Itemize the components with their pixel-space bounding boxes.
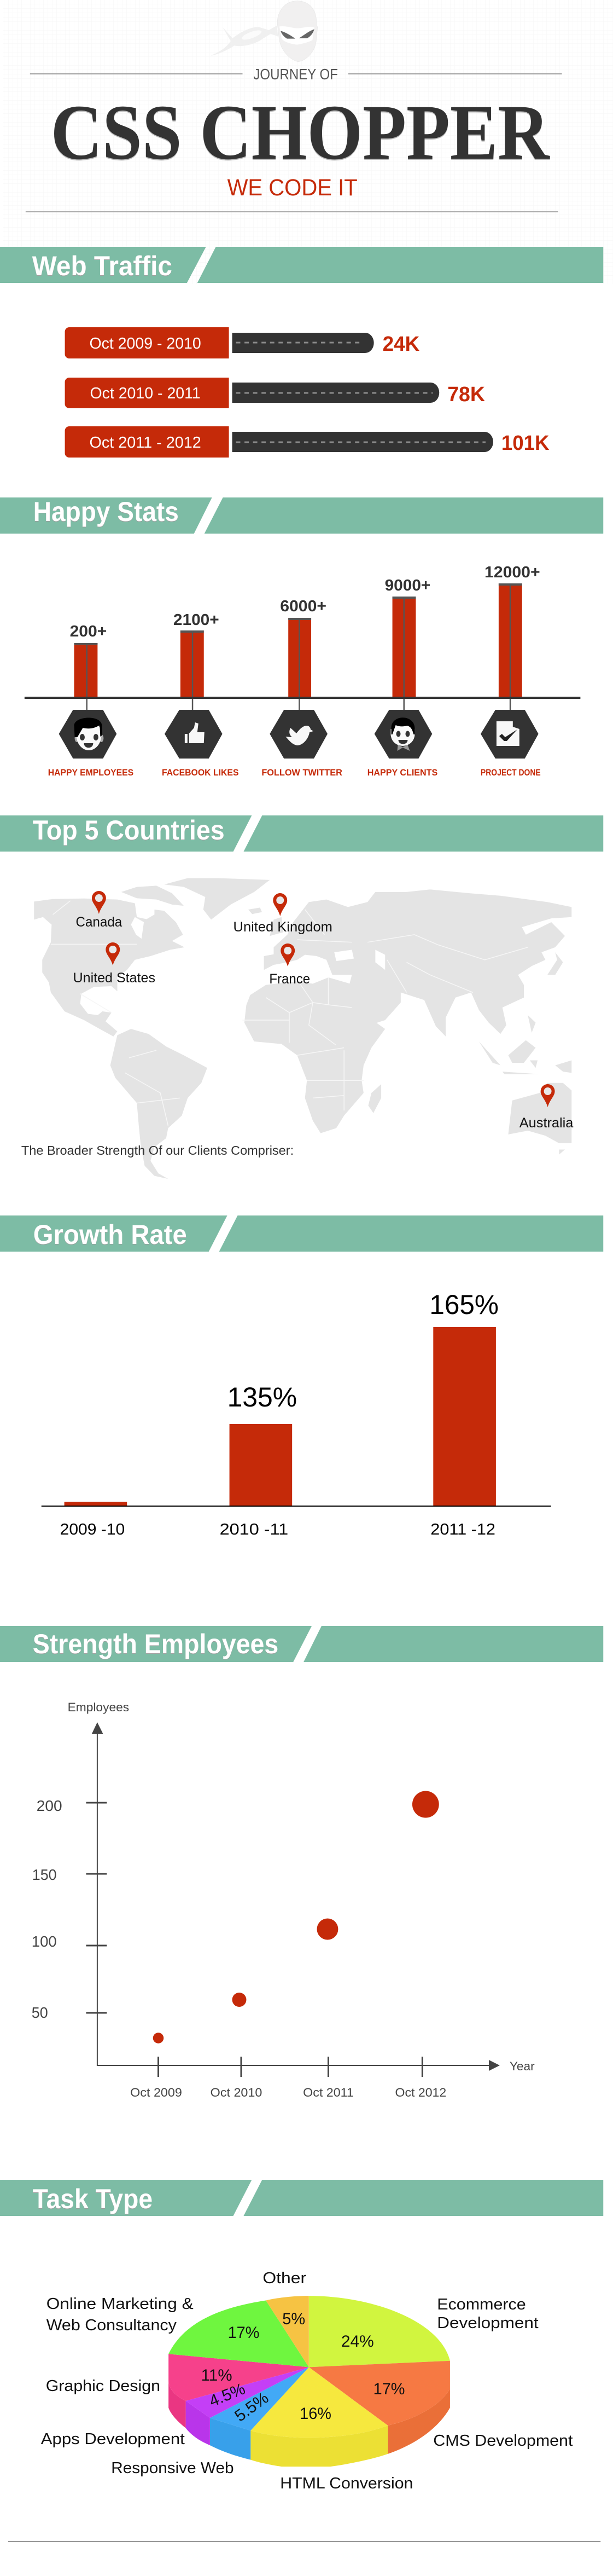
traffic bar: 2009-2010: 24K: [383, 333, 420, 356]
stat: project done: [481, 564, 541, 778]
heading band: task type: [0, 2180, 603, 2216]
pie chart: task types: 11%: [201, 2366, 232, 2384]
bubble chart: employees: Oct 2010: [211, 2086, 262, 2099]
traffic bar: 2011-2012: Oct 2011 - 2012: [89, 434, 201, 451]
pie labels: Responsive Web: [111, 2459, 234, 2477]
map caption: The Broader Strength Of our Clients Compriser:: [21, 1143, 294, 1157]
heading band: strength employees: [0, 1626, 603, 1662]
divider left: [30, 73, 242, 74]
stat: facebook likes: [162, 611, 239, 778]
divider right: [348, 73, 562, 74]
traffic bar: 2009-2010: [65, 327, 420, 358]
bubble chart: employees: Oct 2011: [303, 2086, 354, 2099]
bar chart: growth: 135%: [227, 1382, 297, 1413]
icon: ninja mascot: [211, 1, 318, 62]
pin: united kingdom: [273, 893, 287, 916]
pin: canada: [92, 891, 106, 914]
traffic bar: 2009-2010: Oct 2009 - 2010: [89, 335, 201, 352]
pie chart: task types: 24%: [341, 2332, 374, 2351]
heading band: growth rate: Growth Rate: [33, 1219, 187, 1250]
country labels: France: [269, 971, 310, 987]
icon: checked document: [497, 721, 519, 746]
icon: thumbs up: [185, 722, 205, 743]
stat: happy clients: [367, 577, 437, 778]
bubble chart: employees: 150: [32, 1866, 57, 1883]
traffic bar: 2011-2012: [65, 426, 550, 458]
pie labels: CMS Development: [433, 2432, 573, 2450]
stat: facebook likes: FACEBOOK LIKES: [162, 767, 239, 778]
bar chart: growth: 165%: [429, 1289, 499, 1320]
traffic bar: 2011-2012: 101K: [501, 432, 550, 455]
heading band: web traffic: [0, 247, 603, 283]
section: strength employees: [0, 1626, 603, 2099]
heading band: happy stats: Happy Stats: [33, 496, 179, 527]
stat: happy clients: 9000+: [385, 577, 430, 594]
stat: project done: PROJECT DONE: [481, 767, 541, 778]
pie chart: task types: 16%: [300, 2405, 331, 2423]
pie labels: Apps Development: [41, 2430, 185, 2448]
bubble chart: employees: [32, 1700, 535, 2099]
bar chart: growth: 2010 -11: [220, 1521, 288, 1538]
section: happy stats: [0, 496, 603, 778]
country labels: Australia: [519, 1115, 574, 1131]
header rule: [26, 211, 558, 212]
timeline axis: [25, 697, 580, 699]
stat: happy employees: [48, 623, 133, 778]
pie labels: [41, 2270, 573, 2492]
heading band: happy stats: [0, 496, 603, 534]
bar chart: growth: 2011 -12: [430, 1521, 495, 1538]
section: growth rate: [0, 1215, 603, 1538]
stat: happy clients: HAPPY CLIENTS: [367, 767, 437, 778]
pie labels: Other: [262, 2270, 306, 2287]
stat: facebook likes: 2100+: [173, 611, 219, 629]
pin: france: [281, 943, 295, 966]
pie labels: Online Marketing &: [46, 2295, 194, 2313]
pie chart: task types: 17%: [373, 2380, 405, 2398]
stat: follow twitter: [261, 598, 342, 778]
pie chart: task types: 17%: [228, 2324, 259, 2342]
bubble chart: employees: Employees: [68, 1700, 129, 1714]
pie labels: Ecommerce: [437, 2296, 526, 2313]
pie labels: Development: [437, 2314, 539, 2332]
kicker: journey of: JOURNEY OF: [253, 66, 338, 83]
country labels: [73, 914, 574, 1131]
stat: follow twitter: 6000+: [280, 598, 326, 615]
bubble chart: employees: Year: [510, 2059, 535, 2073]
pie chart: task types: 5%: [282, 2310, 305, 2328]
country labels: United States: [73, 970, 155, 986]
heading band: strength employees: Strength Employees: [33, 1629, 278, 1659]
bubble chart: employees: Oct 2012: [395, 2086, 446, 2099]
traffic bar: 2010-2011: 78K: [447, 383, 486, 406]
traffic bar: 2010-2011: Oct 2010 - 2011: [90, 385, 201, 402]
icon: employee face: [74, 717, 103, 750]
pin: united states: [106, 942, 120, 965]
country labels: Canada: [76, 914, 122, 930]
pie labels: Web Consultancy: [46, 2317, 177, 2334]
bubble chart: employees: 100: [32, 1933, 57, 1950]
section: top 5 countries: [0, 815, 603, 1179]
title: CSS CHOPPER: [51, 89, 551, 176]
bubble chart: employees: 200: [37, 1797, 62, 1814]
heading band: growth rate: [0, 1215, 603, 1252]
traffic bar: 2010-2011: [65, 378, 486, 408]
world map: [34, 878, 571, 1179]
heading band: top 5 countries: Top 5 Countries: [33, 815, 225, 846]
heading band: task type: Task Type: [33, 2184, 153, 2214]
stat: happy employees: HAPPY EMPLOYEES: [48, 767, 133, 778]
heading band: top 5 countries: [0, 815, 603, 852]
pie chart: task types: [168, 2296, 450, 2467]
icon: twitter bird: [285, 726, 313, 745]
pie labels: HTML Conversion: [280, 2475, 413, 2492]
section: web traffic: [0, 247, 603, 458]
bubble chart: employees: 50: [32, 2004, 48, 2021]
pie labels: Graphic Design: [46, 2377, 160, 2395]
bar chart: growth: [42, 1289, 551, 1538]
bubble chart: employees: Oct 2009: [130, 2086, 182, 2099]
country labels: United Kingdom: [233, 919, 332, 935]
heading band: web traffic: Web Traffic: [32, 251, 172, 281]
header: [26, 1, 562, 212]
pie chart: task types: 4.5%: [207, 2380, 248, 2411]
stat: happy employees: 200+: [70, 623, 107, 640]
stat: project done: 12000+: [484, 564, 540, 581]
stat: follow twitter: FOLLOW TWITTER: [261, 767, 342, 778]
icon: client face: [391, 717, 414, 751]
pie chart: task types: 5.5%: [231, 2389, 272, 2426]
subtitle: WE CODE IT: [227, 175, 358, 201]
pin: australia: [541, 1084, 555, 1107]
bar chart: growth: 2009 -10: [60, 1521, 125, 1538]
section: task type: [0, 2180, 603, 2492]
